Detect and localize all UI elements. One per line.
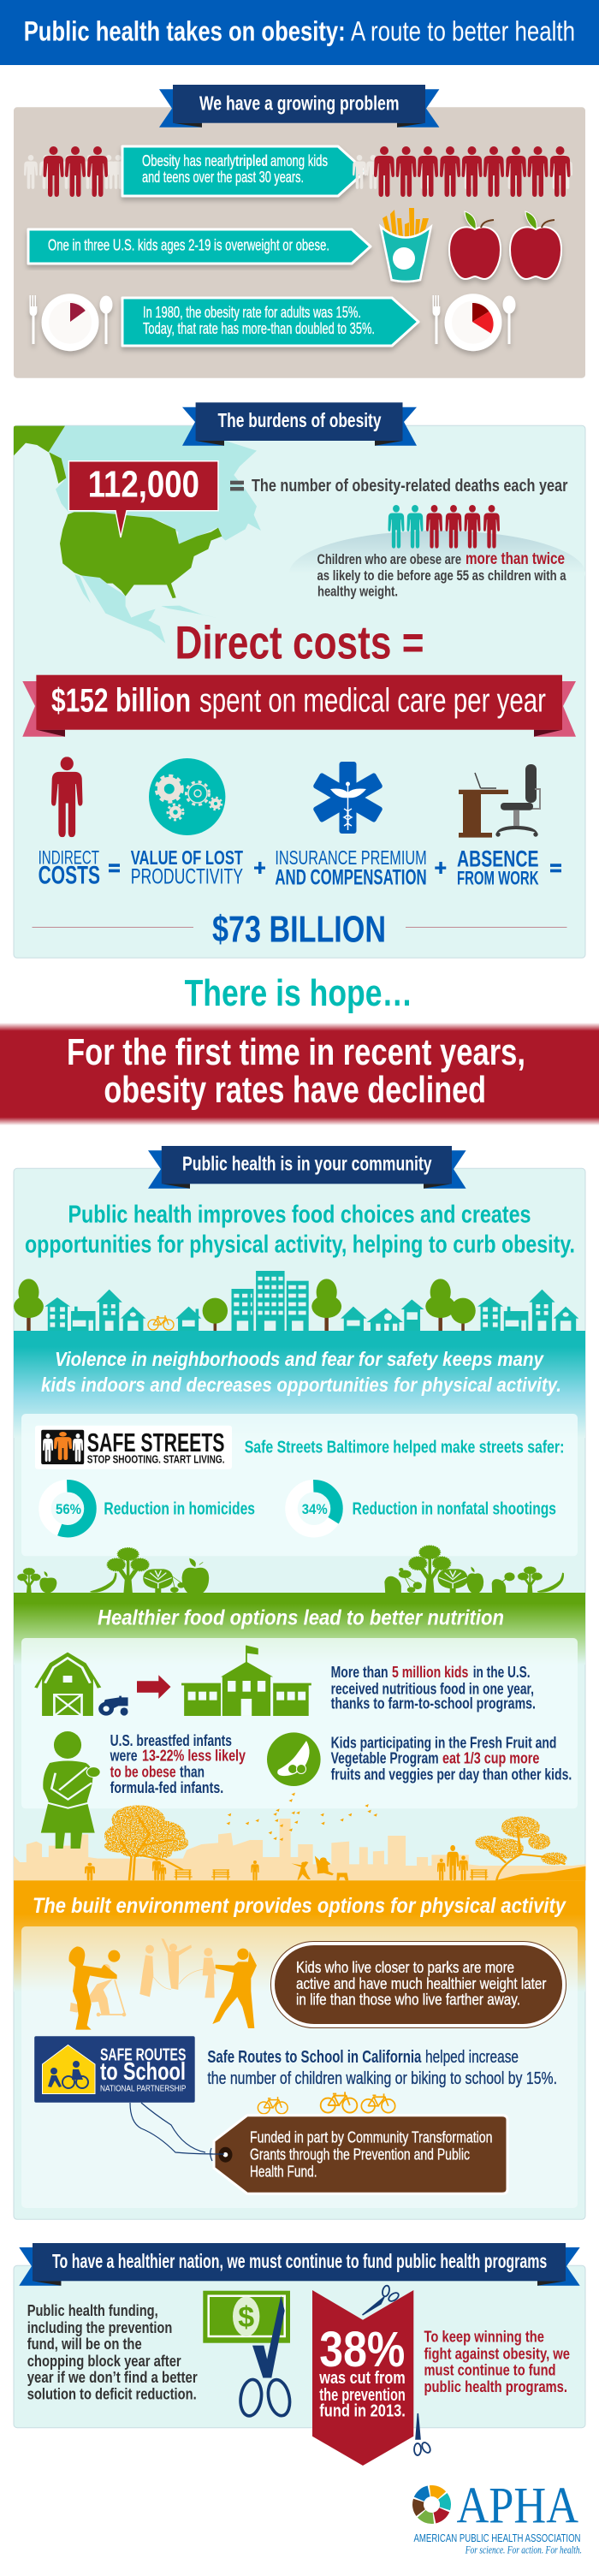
indirect costs equation — [39, 846, 561, 890]
icon: plate 35 percent — [433, 294, 515, 351]
map of North America — [14, 426, 261, 644]
callout: 112,000 — [68, 461, 218, 537]
text: reduction in homicides: Reduction in homicides — [104, 1499, 255, 1518]
text: farm to school: received nutritious food in one year, — [331, 1679, 534, 1697]
logo ring — [412, 2485, 451, 2524]
icon: fries — [381, 208, 431, 282]
band: violence in neighborhoods — [14, 1331, 585, 1438]
tag: funding: Grants through the Prevention and Public — [250, 2146, 470, 2163]
icon: star of life — [312, 762, 383, 834]
ribbon: 38 percent: 38% — [319, 2322, 405, 2377]
banner: public health is in your community — [148, 1146, 466, 1189]
text: breastfed infants: were — [110, 1747, 138, 1765]
icon: mother and baby — [41, 1731, 100, 1849]
text: keep winning: must continue to fund — [424, 2362, 556, 2379]
text: chopping block: fund, will be on the — [27, 2336, 142, 2353]
falling leaves — [227, 1793, 377, 1841]
ribbon: 152 billion — [22, 675, 576, 737]
chart: 56 percent donut — [44, 1486, 91, 1531]
heading: improves food choices — [25, 1201, 575, 1258]
panel: growing problem — [14, 107, 585, 378]
callout: adult rate: In 1980, the obesity rate for adults was 15%. — [143, 304, 361, 321]
tag: funding — [210, 2116, 507, 2193]
icon: bicycle — [148, 1315, 174, 1330]
arrow: farm to school — [137, 1675, 171, 1699]
band: obesity rates declined — [0, 1023, 599, 1125]
callout: parks: Kids who live closer to parks are more — [296, 1959, 514, 1976]
panel: physical activity — [21, 1926, 578, 2208]
text: safe routes california — [207, 2048, 557, 2088]
text: breastfed infants — [110, 1731, 246, 1796]
callout: adult rate — [122, 298, 418, 346]
chart: 34 percent donut — [291, 1486, 337, 1531]
banner: healthier nation — [19, 2243, 580, 2286]
chart: 34 percent donut: 34% — [302, 1501, 328, 1517]
illustration: neighborhood skyline — [14, 1271, 578, 1331]
text: breastfed infants: formula-fed infants. — [110, 1778, 223, 1796]
callout: tripled: and teens over the past 30 years. — [142, 169, 304, 186]
callout: tripled — [122, 146, 365, 196]
indirect costs equation: INSURANCE PREMIUM — [275, 846, 427, 869]
icon: white and red people left — [24, 146, 125, 197]
chart: 56 percent donut: 56% — [56, 1501, 81, 1517]
banner: the burdens of obesity — [182, 402, 417, 446]
tree: right — [475, 1816, 567, 1880]
ribbon: 38 percent: the prevention — [319, 2386, 406, 2405]
callout: parks: in life than those who live farther away. — [296, 1991, 520, 2008]
text: children twice as likely: more than twice — [466, 550, 565, 568]
title: Public health takes on obesity: — [24, 16, 346, 47]
callout: one in three — [28, 229, 371, 264]
logo: safe streets: SAFE STREETS — [87, 1427, 224, 1457]
icons: bicycles — [258, 2092, 395, 2114]
text: children twice as likely: Children who are obese are — [317, 551, 461, 567]
logo: APHA — [412, 2477, 582, 2555]
panel: funding — [14, 2265, 585, 2466]
callout: 112,000: 112,000 — [88, 465, 199, 506]
text: safe routes california: helped increase — [425, 2048, 519, 2067]
indirect costs equation: VALUE OF LOST — [131, 846, 243, 869]
callout: tripled: Obesity has nearly — [142, 152, 235, 169]
text: farm to school: in the U.S. — [473, 1663, 531, 1681]
callout: tripled: among kids — [270, 152, 328, 169]
callout: one in three: One in three U.S. kids ages 2-19 is overweight or obese. — [48, 237, 329, 254]
text: fresh fruit program: Vegetable Program — [331, 1749, 439, 1767]
icon: six children — [388, 505, 500, 549]
indirect costs equation: PRODUCTIVITY — [131, 865, 243, 889]
logo: safe streets — [35, 1426, 232, 1469]
text: breastfed infants: to be obese — [110, 1763, 176, 1781]
text: fresh fruit program — [331, 1733, 572, 1783]
icon: plate 15 percent — [29, 294, 113, 351]
text: chopping block: year if we don’t find a better — [27, 2369, 198, 2386]
callout: tripled: tripled — [235, 152, 268, 169]
text: chopping block: including the prevention — [27, 2319, 172, 2336]
text: breastfed infants: than — [180, 1763, 205, 1781]
panel: public health in your community — [14, 1168, 585, 2219]
icon: school — [181, 1646, 311, 1716]
text: fresh fruit program: eat 1/3 cup more — [442, 1749, 539, 1767]
illustration: vegetables silhouettes — [17, 1546, 564, 1593]
icon: large scissors — [238, 2296, 293, 2418]
ribbon: 38 percent: was cut from — [318, 2369, 406, 2388]
text: keep winning: public health programs. — [424, 2378, 567, 2395]
people in the park — [85, 1845, 468, 1880]
string from logo to tag — [130, 2103, 224, 2154]
illustration: autumn park skyline — [14, 1793, 585, 1880]
text: safe routes california: Safe Routes to School in California — [207, 2048, 422, 2067]
panel: burdens of obesity — [14, 425, 585, 958]
text: keep winning: fight against obesity, we — [424, 2346, 570, 2363]
logo: safe routes to school: NATIONAL PARTNERSHIP — [100, 2084, 187, 2093]
text: chopping block: solution to deficit reduction. — [27, 2385, 197, 2402]
band: built environment — [14, 1880, 585, 1991]
text: farm to school: 5 million kids — [392, 1663, 468, 1681]
text: chopping block: Public health funding, — [27, 2302, 158, 2319]
band: violence in neighborhoods: Violence in neighborhoods and fear for safety keeps many — [55, 1348, 544, 1370]
callout: parks — [270, 1941, 566, 2028]
icon: apples — [449, 211, 561, 279]
text: chopping block — [27, 2302, 198, 2402]
text: children twice as likely — [317, 550, 566, 600]
park benches — [174, 1870, 488, 1880]
icon: person — [51, 757, 82, 837]
band: obesity rates declined: obesity rates have declined — [104, 1070, 486, 1111]
icon: barn — [34, 1653, 101, 1716]
indirect costs equation: FROM WORK — [457, 867, 539, 888]
icon: dollar bill: $ — [238, 2301, 254, 2334]
equals sign — [230, 481, 244, 491]
icon: desk and chair — [459, 764, 540, 838]
illustration: kids playing — [69, 1938, 257, 2030]
ribbon: 38 percent: fund in 2013. — [319, 2401, 406, 2420]
banner: we have a growing problem — [159, 85, 439, 128]
logo: safe routes to school: to School — [100, 2058, 186, 2086]
text: farm to school: thanks to farm-to-school programs. — [331, 1695, 536, 1712]
total: 73 billion: $73 BILLION — [212, 910, 386, 951]
band: healthier food options — [14, 1593, 585, 1665]
banner: the burdens of obesity: The burdens of obesity — [217, 409, 382, 431]
banner: public health is in your community: Public health is in your community — [182, 1152, 432, 1174]
text: farm to school — [331, 1663, 536, 1712]
callout: parks: active and have much healthier weight later — [296, 1975, 546, 1992]
logo: APHA: APHA — [457, 2477, 578, 2533]
band: healthier food options: Healthier food options lead to better nutrition — [98, 1606, 504, 1629]
icon: gears — [149, 758, 225, 835]
text: farm to school: More than — [331, 1663, 388, 1681]
heading: there is hope: There is hope… — [185, 973, 412, 1014]
icon: small scissors bottom — [414, 2413, 432, 2455]
ribbon: 38 percent — [312, 2290, 413, 2466]
indirect costs equation: INDIRECT — [39, 846, 99, 868]
text: breastfed infants: 13-22% less likely — [142, 1747, 246, 1765]
text: chopping block: chopping block year after — [27, 2353, 181, 2370]
panel: safe streets — [21, 1414, 578, 1556]
text: keep winning: To keep winning the — [424, 2329, 544, 2346]
panel: nutrition — [21, 1638, 578, 1808]
indirect costs equation: ABSENCE — [457, 846, 539, 872]
banner: we have a growing problem: We have a growing problem — [199, 92, 399, 114]
tree: left — [104, 1805, 188, 1880]
indirect costs equation: AND COMPENSATION — [275, 865, 427, 889]
ribbon: 152 billion: $152 billion — [51, 683, 191, 720]
icon: small scissors top — [363, 2285, 400, 2315]
callout: adult rate: Today, that rate has more-than doubled to 35%. — [143, 320, 375, 337]
icon: dollar bill — [203, 2291, 290, 2343]
icon: cucumber circle — [267, 1732, 321, 1786]
text: breastfed infants: U.S. breastfed infants — [110, 1731, 232, 1749]
header: title bar — [0, 0, 599, 65]
indirect costs equation: COSTS — [39, 862, 100, 890]
text: children twice as likely: healthy weight. — [317, 584, 398, 600]
text: keep winning — [424, 2329, 570, 2395]
logo: safe routes to school: SAFE ROUTES — [100, 2046, 186, 2065]
tag: funding: Funded in part by Community Transformation — [250, 2128, 493, 2146]
heading: direct costs: Direct costs = — [175, 615, 424, 668]
tag: funding: Health Fund. — [250, 2163, 317, 2180]
logo: safe streets: STOP SHOOTING. START LIVING. — [87, 1452, 224, 1465]
icon: tractor — [98, 1696, 128, 1716]
shadow ellipse — [294, 531, 585, 576]
icon: white and red people right — [353, 146, 572, 197]
logo: safe routes to school — [34, 2036, 195, 2103]
